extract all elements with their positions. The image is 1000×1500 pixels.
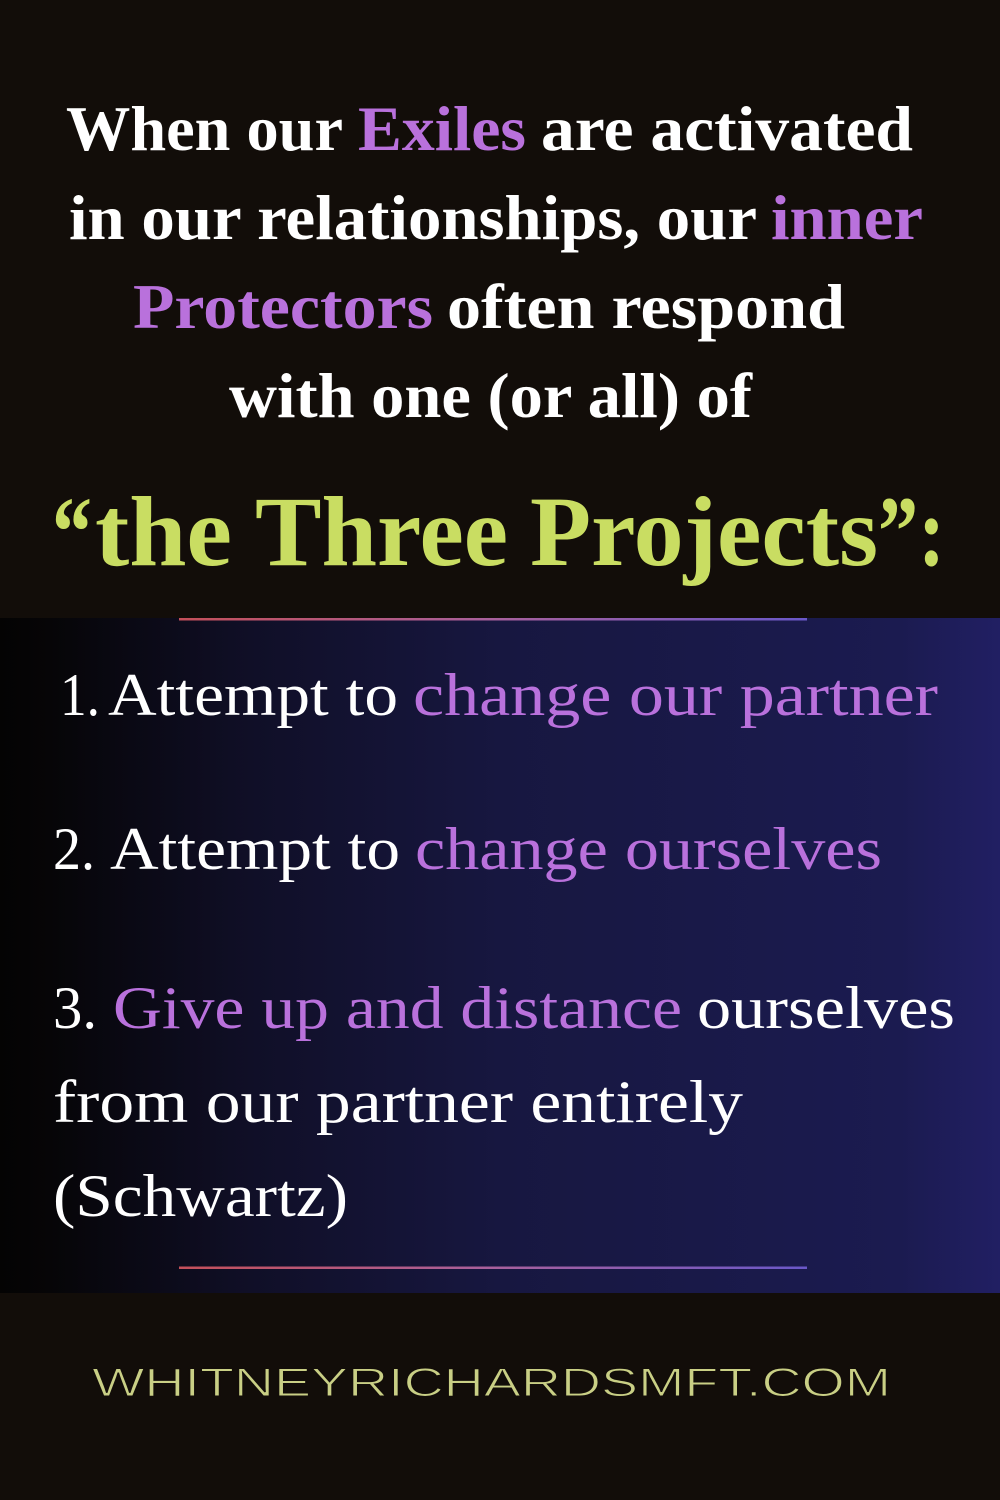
list item 3: 3. [53, 975, 97, 1041]
heading: intro statement: When our [66, 94, 343, 164]
list item 1: Attempt to [108, 662, 398, 728]
list item 3: from our partner entirely [53, 1069, 743, 1135]
heading: the Three Projects: ”: [878, 476, 945, 587]
divider: top rule [179, 618, 807, 620]
heading: intro statement: often respond [447, 272, 845, 342]
list item 1: 1. [60, 662, 100, 728]
list item 2: Attempt to [110, 816, 400, 882]
heading: the Three Projects: “ [52, 476, 92, 587]
list item 2 [53, 816, 882, 882]
list item 3: ourselves [697, 975, 955, 1041]
heading: intro statement: are activated [541, 94, 913, 164]
heading: intro statement: Protectors [133, 272, 433, 342]
list item 3 [53, 975, 955, 1229]
list item 2: change ourselves [415, 816, 882, 882]
heading: the Three Projects: Projects [530, 476, 878, 587]
list item 2: 2. [53, 816, 95, 882]
heading: intro statement: with one (or all) of [229, 361, 753, 431]
list item 3: (Schwartz) [53, 1163, 348, 1229]
heading: the Three Projects: the [95, 476, 232, 587]
list item 1: change our partner [413, 662, 938, 728]
heading: intro statement: inner [771, 183, 923, 253]
heading: the Three Projects [52, 476, 945, 587]
divider: bottom rule [179, 1266, 807, 1269]
heading: the Three Projects: Three [255, 476, 508, 587]
list item 1 [60, 662, 938, 728]
heading: intro statement: in our relationships, our [69, 183, 757, 253]
footer: website URL: WHITNEYRICHARDSMFT.COM [92, 1361, 891, 1405]
panel: gradient list background [0, 618, 1000, 1293]
heading: intro statement: Exiles [358, 94, 526, 164]
heading: intro statement [66, 94, 923, 431]
list item 3: Give up and distance [113, 975, 682, 1041]
